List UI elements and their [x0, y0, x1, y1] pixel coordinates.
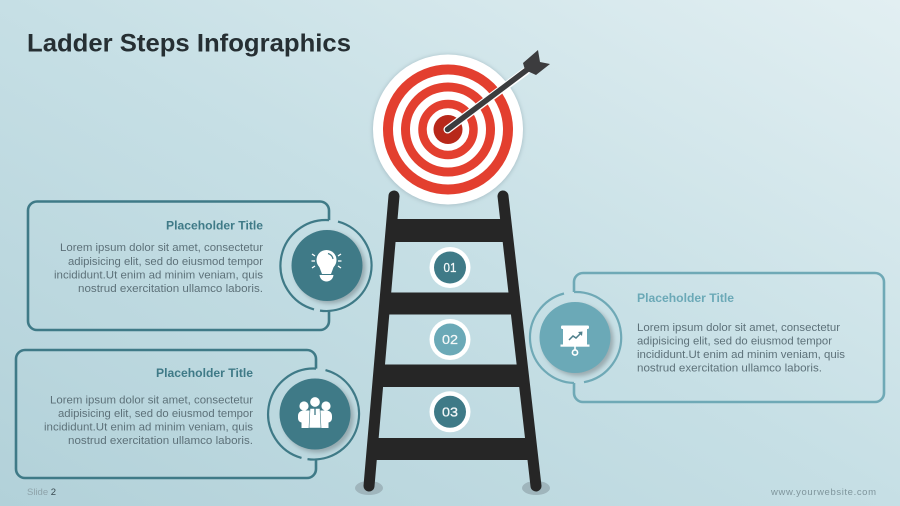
- target with arrow: [372, 50, 550, 206]
- ring left arc: [530, 294, 574, 383]
- panel: right: [530, 273, 884, 402]
- left foot shadow: [355, 481, 383, 495]
- step badge 02: [430, 319, 470, 360]
- ladder: [355, 196, 550, 495]
- panel text: adipisicing elit, sed do eiusmod tempor: [637, 336, 832, 348]
- circle: [292, 230, 362, 301]
- panel text: [54, 242, 264, 295]
- step badge 01: 01: [444, 260, 456, 275]
- footer website: www.yourwebsite.com: [770, 487, 876, 498]
- ring left arc: [280, 220, 329, 309]
- panel text: incididunt.Ut enim ad minim veniam, quis: [637, 349, 846, 361]
- footer slide number: Slide 2: [27, 487, 56, 498]
- arrow shaft: [448, 69, 528, 130]
- panel text: [44, 394, 254, 447]
- bullseye: [434, 115, 462, 144]
- step badge 01: [430, 247, 470, 288]
- red ring inner: [422, 104, 474, 155]
- step badge 02: 02: [442, 332, 458, 347]
- panel: top left: [28, 202, 372, 330]
- step badge 03: 03: [442, 404, 458, 419]
- panel text: Lorem ipsum dolor sit amet, consectetur: [637, 322, 840, 334]
- left rail: [369, 196, 394, 486]
- panel outline: [28, 202, 329, 330]
- ring right arc: [574, 292, 621, 382]
- title: Ladder Steps Infographics: [27, 30, 351, 58]
- circle: [280, 378, 350, 450]
- panel text: adipisicing elit, sed do eiusmod tempor: [58, 408, 253, 420]
- panel: bottom left: [16, 350, 359, 478]
- arrow outline: [448, 71, 526, 130]
- circle shadow: [294, 232, 366, 304]
- rung 2: [382, 292, 518, 314]
- ring left arc: [268, 369, 316, 458]
- panel heading: Placeholder Title: [166, 218, 263, 232]
- target shadow: [372, 54, 524, 206]
- circle shadow: [282, 382, 354, 452]
- panel text: nostrud exercitation ullamco laboris.: [637, 362, 822, 374]
- panel text: [637, 322, 846, 374]
- icon: light bulb: [312, 250, 342, 282]
- right rail: [503, 196, 536, 486]
- panel text: adipisicing elit, sed do eiusmod tempor: [68, 256, 263, 268]
- icon: presentation board: [560, 326, 590, 355]
- white disc: [373, 54, 523, 204]
- panel heading: Placeholder Title: [156, 366, 253, 380]
- red ring middle: [406, 87, 490, 172]
- panel text: nostrud exercitation ullamco laboris.: [78, 283, 263, 295]
- right foot shadow: [522, 481, 550, 495]
- circle shadow: [542, 305, 614, 376]
- red ring outer: [388, 70, 508, 190]
- circle: [540, 302, 610, 373]
- panel text: nostrud exercitation ullamco laboris.: [68, 435, 253, 447]
- rung 3: [376, 364, 526, 387]
- step badge 03: [430, 391, 470, 432]
- rung 4: [370, 438, 534, 460]
- icon: people: [298, 397, 332, 428]
- panel outline: [574, 273, 884, 402]
- panel text: Lorem ipsum dolor sit amet, consectetur: [60, 242, 263, 254]
- ring right arc: [308, 370, 359, 460]
- rung 1: [389, 219, 509, 242]
- panel text: Lorem ipsum dolor sit amet, consectetur: [50, 394, 253, 406]
- panel text: incididunt.Ut enim ad minim veniam, quis: [54, 270, 264, 282]
- panel outline: [16, 350, 316, 478]
- panel text: incididunt.Ut enim ad minim veniam, quis: [44, 422, 254, 434]
- panel heading: Placeholder Title: [637, 291, 734, 305]
- ring right arc: [320, 222, 372, 311]
- arrow fletching: [523, 50, 550, 75]
